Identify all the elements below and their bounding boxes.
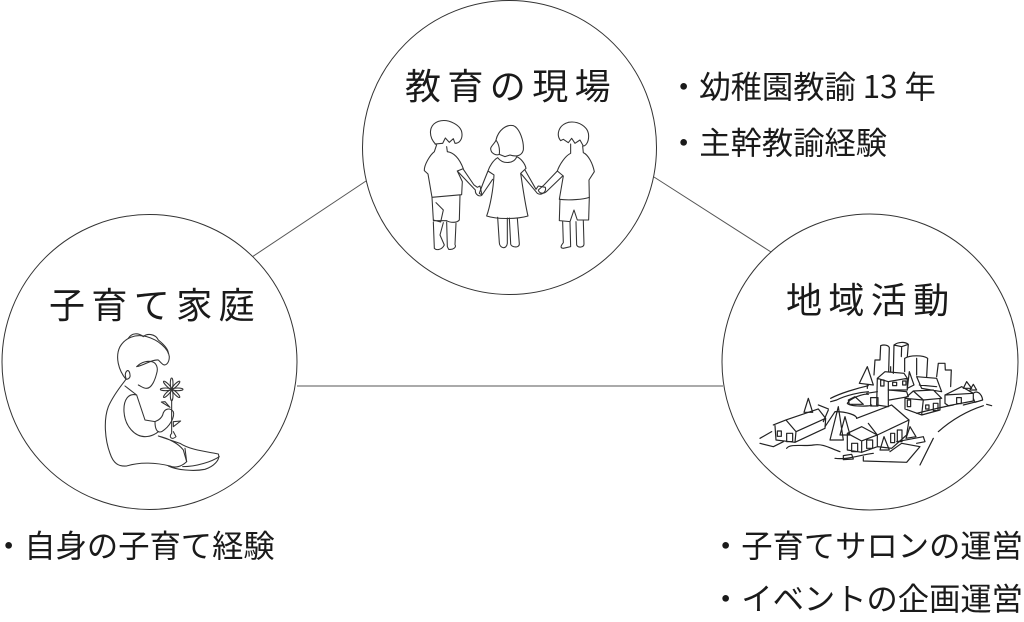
connector: family to community: [297, 385, 723, 387]
icon: child with flower: [105, 334, 219, 470]
icon: town with houses: [760, 342, 992, 465]
text block: community experience: ・イベントの企画運営: [710, 575, 1023, 620]
text block: education experience: [668, 63, 936, 164]
connector: education to community: [654, 177, 771, 252]
text block: education experience: ・主幹教諭経験: [668, 119, 887, 164]
panel: community circle: [722, 214, 1018, 510]
panel: family circle: [2, 214, 297, 510]
icon: three children holding hands: [424, 121, 594, 250]
connector: education to family: [252, 181, 366, 257]
text block: family experience: ・自身の子育て経験: [0, 522, 275, 567]
text block: community experience: ・子育てサロンの運営: [710, 522, 1023, 567]
text block: community experience: [710, 522, 1023, 620]
heading: community: 地域活動: [786, 272, 956, 324]
heading: family: 子育て家庭: [49, 277, 261, 329]
panel: education circle: [362, 0, 656, 294]
text block: education experience: ・幼稚園教諭 13 年: [668, 63, 936, 108]
heading: education: 教育の現場: [405, 58, 617, 110]
